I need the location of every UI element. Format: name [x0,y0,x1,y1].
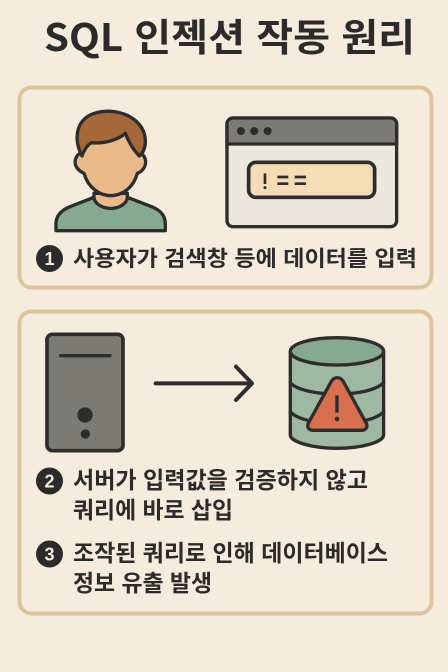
step 2 number badge [36,468,63,494]
title: SQL 인젝션 작동 원리 [44,7,415,62]
warning triangle [308,378,367,430]
step 1 number badge [36,245,63,272]
search input box [249,162,375,197]
step 3 number badge: 3 [44,544,55,564]
step 2 text: 쿼리에 바로 삽입 [73,497,233,523]
step 1 number badge: 1 [44,249,55,269]
step 1 text: 사용자가 검색창 등에 데이터를 입력 [73,247,417,271]
step 2 text [73,467,368,523]
icon: browser window [227,118,397,227]
icon: server [47,334,123,451]
step 3 text: 조작된 쿼리로 인해 데이터베이스 [73,540,388,566]
step 3 text [73,540,388,596]
icon: database with warning [290,338,384,448]
panel: steps 2 and 3 server to database [20,312,432,614]
arrow: server to database [156,367,252,400]
step 2 number badge: 2 [44,472,55,492]
icon: user [56,111,165,231]
step 2 text: 서버가 입력값을 검증하지 않고 [73,467,368,493]
step 3 number badge [36,540,63,568]
panel: step 1 user input [20,88,432,288]
step 3 text: 정보 유출 발생 [73,570,212,596]
